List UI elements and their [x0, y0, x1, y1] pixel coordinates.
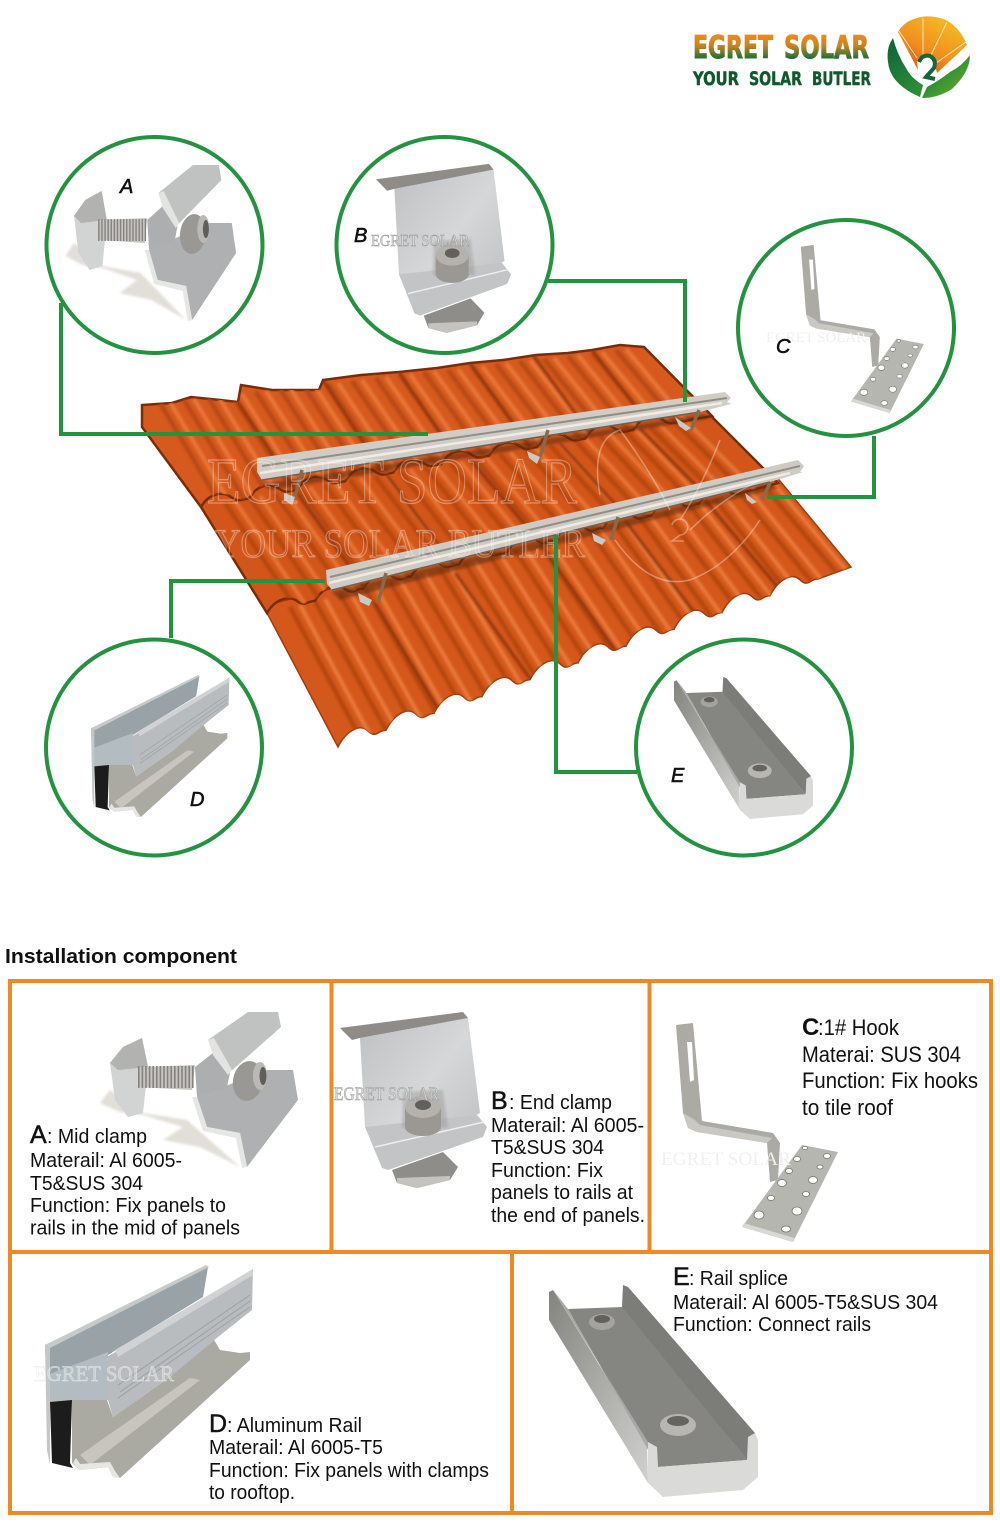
description B: B [491, 1087, 508, 1115]
watermark B: EGRET SOLAR [371, 231, 470, 250]
callout circle D: aluminum rail [46, 640, 262, 856]
section heading: Installation component [5, 946, 237, 968]
rail 2 hooks [358, 483, 770, 606]
description C: C [802, 1014, 819, 1041]
letter D: D [190, 789, 204, 811]
logo tagline: SOLAR [749, 68, 802, 90]
description E: E [673, 1263, 690, 1291]
description E: : Rail splice [689, 1268, 788, 1290]
panel E: rail splice [549, 1263, 938, 1497]
logo tagline [692, 68, 871, 90]
description D [209, 1410, 489, 1504]
component table frame [10, 981, 991, 1513]
letter C: C [776, 336, 791, 358]
part image E [549, 1285, 758, 1497]
part image C [676, 1023, 838, 1242]
roof tile row 1 [142, 345, 712, 507]
connector line: E [556, 535, 637, 772]
panel B: end clamp [334, 1012, 645, 1227]
part image A [100, 1012, 298, 1168]
description A: Materail: Al 6005- [30, 1150, 182, 1172]
description B: the end of panels. [491, 1205, 645, 1227]
logo wordmark: EGRET [693, 30, 773, 66]
letter A: A [119, 176, 133, 198]
description B: : End clamp [509, 1092, 612, 1114]
part image B [340, 1012, 487, 1188]
description D: D [209, 1410, 227, 1438]
watermark panel D: EGRET SOLAR [34, 1361, 174, 1386]
connector line: B [548, 281, 685, 402]
description E: Materail: Al 6005-T5&SUS 304 [673, 1292, 938, 1314]
logo mark: sun and leaves [888, 16, 970, 98]
logo [692, 16, 970, 98]
logo tagline: BUTLER [812, 68, 871, 90]
logo wordmark [693, 30, 869, 66]
connector line: C [767, 436, 874, 497]
watermark C: EGRET SOLAR [766, 330, 866, 346]
rail 1 [257, 392, 731, 490]
description C: Function: Fix hooks [802, 1068, 978, 1093]
panel D: aluminum rail [34, 1265, 489, 1504]
description E: Function: Connect rails [673, 1314, 871, 1336]
description D: to rooftop. [209, 1482, 295, 1504]
watermark panel C: EGRET SOLAR [661, 1149, 791, 1170]
letter B: B [354, 225, 367, 247]
description B [491, 1087, 645, 1227]
tile roof with rails [142, 345, 851, 747]
panel A: mid clamp [30, 1012, 298, 1240]
callout circle E: rail splice [636, 640, 852, 856]
logo tagline: YOUR [692, 68, 739, 90]
description B: panels to rails at [491, 1182, 633, 1204]
description A: rails in the mid of panels [30, 1218, 240, 1240]
panel C: hook [661, 1014, 978, 1242]
rail 2 [326, 460, 804, 600]
watermark tagline: YOUR SOLAR BUTLER [215, 521, 585, 566]
description C: Materai: SUS 304 [802, 1042, 961, 1067]
description C [802, 1014, 978, 1120]
letter E: E [671, 765, 685, 787]
description C: :1# Hook [818, 1015, 900, 1040]
description A: : Mid clamp [47, 1126, 147, 1148]
callout circle A: mid clamp [46, 137, 262, 353]
description A [30, 1121, 240, 1240]
logo wordmark: SOLAR [784, 30, 869, 66]
watermark emblem [598, 430, 760, 582]
callout circle C: hook [738, 220, 954, 436]
watermark panel B: EGRET SOLAR [334, 1084, 439, 1105]
part image D [45, 1265, 253, 1478]
connector line: D [171, 581, 325, 638]
description B: Function: Fix [491, 1160, 603, 1182]
rail 1 hooks [284, 410, 699, 505]
description A: Function: Fix panels to [30, 1195, 226, 1217]
roof tile row 2 [201, 405, 778, 613]
description D: Function: Fix panels with clamps [209, 1460, 489, 1482]
roof watermark [207, 430, 760, 582]
description D: Materail: Al 6005-T5 [209, 1437, 383, 1459]
roof tile row 3 [267, 475, 851, 747]
connector line: A [61, 303, 428, 434]
description D: : Aluminum Rail [227, 1415, 362, 1437]
description A: T5&SUS 304 [30, 1173, 143, 1195]
description A: A [30, 1121, 47, 1149]
description B: Materail: Al 6005- [491, 1115, 644, 1137]
description B: T5&SUS 304 [491, 1137, 604, 1159]
watermark company name: EGRET SOLAR [207, 445, 577, 518]
callout circle B: end clamp [336, 137, 552, 353]
description E [673, 1263, 938, 1336]
description C: to tile roof [802, 1095, 894, 1120]
